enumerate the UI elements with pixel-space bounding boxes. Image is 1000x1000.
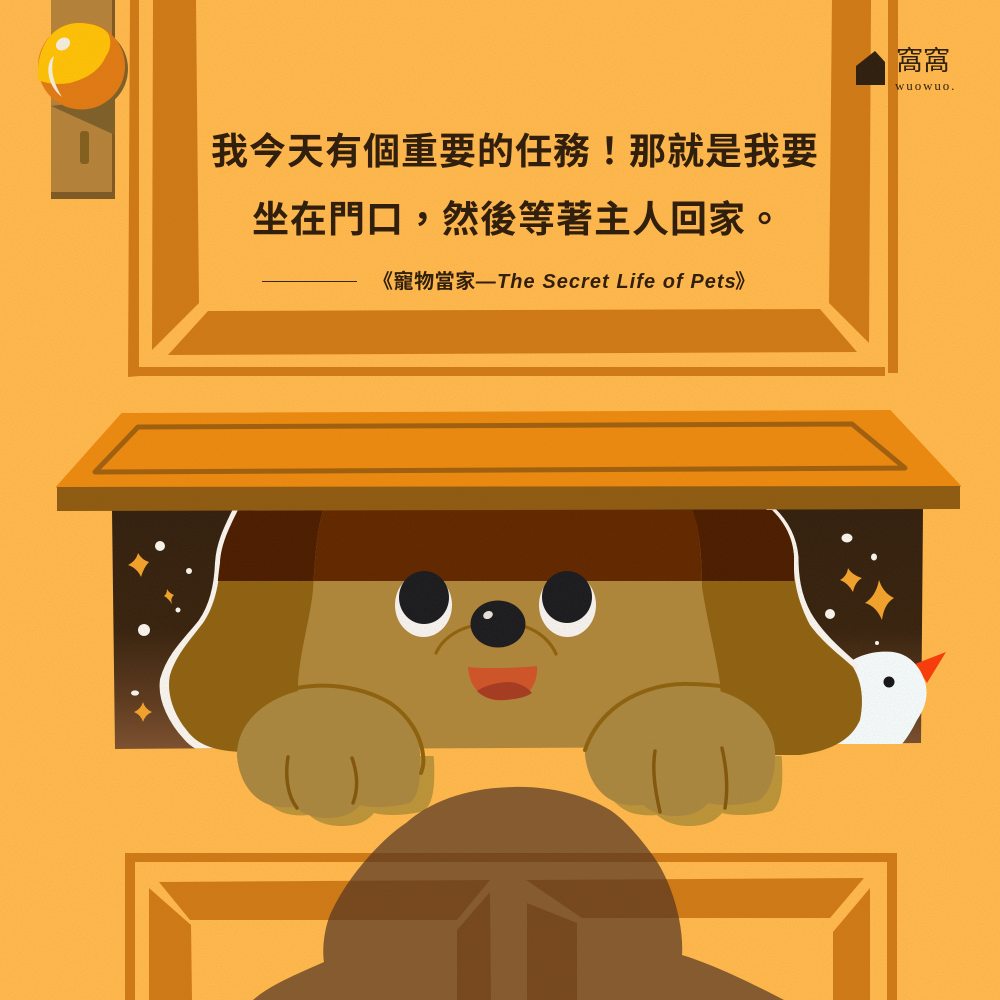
paw outline [585, 684, 720, 750]
quote line one: 我今天有個重要的任務！那就是我要 [211, 131, 819, 172]
lower door panel frame [125, 853, 897, 1000]
left ear outline [165, 510, 238, 752]
right ear outline [768, 508, 856, 668]
bird eye [884, 676, 894, 688]
eye white [539, 573, 596, 637]
citation text: 《寵物當家— [373, 271, 496, 293]
plate [51, 0, 115, 199]
muzzle lines [436, 626, 556, 654]
frame outer line [125, 853, 897, 1000]
face [296, 510, 724, 749]
left paw [237, 686, 423, 818]
left ear [169, 510, 330, 752]
house icon [856, 51, 885, 85]
top left bevel [159, 880, 490, 920]
pupil [542, 571, 592, 623]
citation text: 》 [735, 271, 756, 293]
knob cast shadow [51, 98, 115, 135]
quote line two: 坐在門口，然後等著主人回家。 [252, 199, 784, 240]
mouth [468, 666, 537, 700]
paw outline [297, 686, 423, 773]
brand name: 窩窩 [896, 39, 950, 78]
eye white [395, 573, 452, 637]
left bevel [149, 888, 192, 1000]
face top shade [314, 510, 702, 581]
gold sparkles [128, 553, 894, 722]
viewer shadow silhouette [253, 787, 784, 1000]
bird [830, 652, 946, 744]
flap front edge [57, 486, 960, 511]
white dots [131, 534, 879, 696]
centre right bevel [527, 903, 577, 1000]
door flap [57, 411, 960, 511]
plate edge shadow [51, 0, 115, 199]
frame outer line [128, 0, 898, 377]
right paw shadow [614, 756, 782, 826]
dark opening [112, 509, 923, 749]
centre left bevel [457, 892, 491, 1000]
flap top surface [57, 411, 960, 487]
keyhole [80, 131, 89, 164]
citation rule [262, 281, 357, 282]
bird body [830, 652, 927, 744]
right bevel [833, 888, 870, 1000]
paw shape [585, 685, 775, 816]
sparkles and dots [128, 534, 894, 722]
door lock plate [51, 0, 115, 199]
dog [165, 508, 862, 826]
paw shape [237, 687, 420, 818]
right paw [585, 684, 775, 816]
pupil [399, 571, 449, 624]
knob yellow highlight [38, 23, 110, 84]
nose [470, 600, 526, 648]
ear shade left [218, 510, 323, 581]
citation [262, 269, 756, 293]
frame inner right bevel [829, 0, 871, 343]
frame inner left bevel [152, 0, 199, 350]
ear shade right [692, 510, 794, 581]
frame inner bottom bevel [168, 309, 857, 355]
toe lines [287, 757, 357, 808]
brand latin name: wuowuo. [895, 78, 956, 93]
left paw shadow [270, 756, 434, 826]
tongue [477, 682, 532, 700]
brand logo [856, 39, 956, 93]
knob shine curve [48, 56, 62, 97]
citation text: The Secret Life of Pets [497, 271, 737, 293]
nose highlight [482, 609, 494, 621]
door knob [38, 22, 128, 111]
left eye [395, 571, 452, 637]
knob base [38, 22, 125, 110]
quote [211, 131, 819, 240]
upper door panel frame [128, 0, 898, 377]
knob shadow [44, 27, 128, 111]
bird beak [915, 652, 946, 683]
flap inset line [95, 424, 905, 472]
knob shine dot [53, 35, 73, 53]
right eye [539, 571, 596, 637]
toe lines [654, 748, 727, 812]
top right bevel [526, 878, 864, 918]
right ear [680, 510, 862, 755]
